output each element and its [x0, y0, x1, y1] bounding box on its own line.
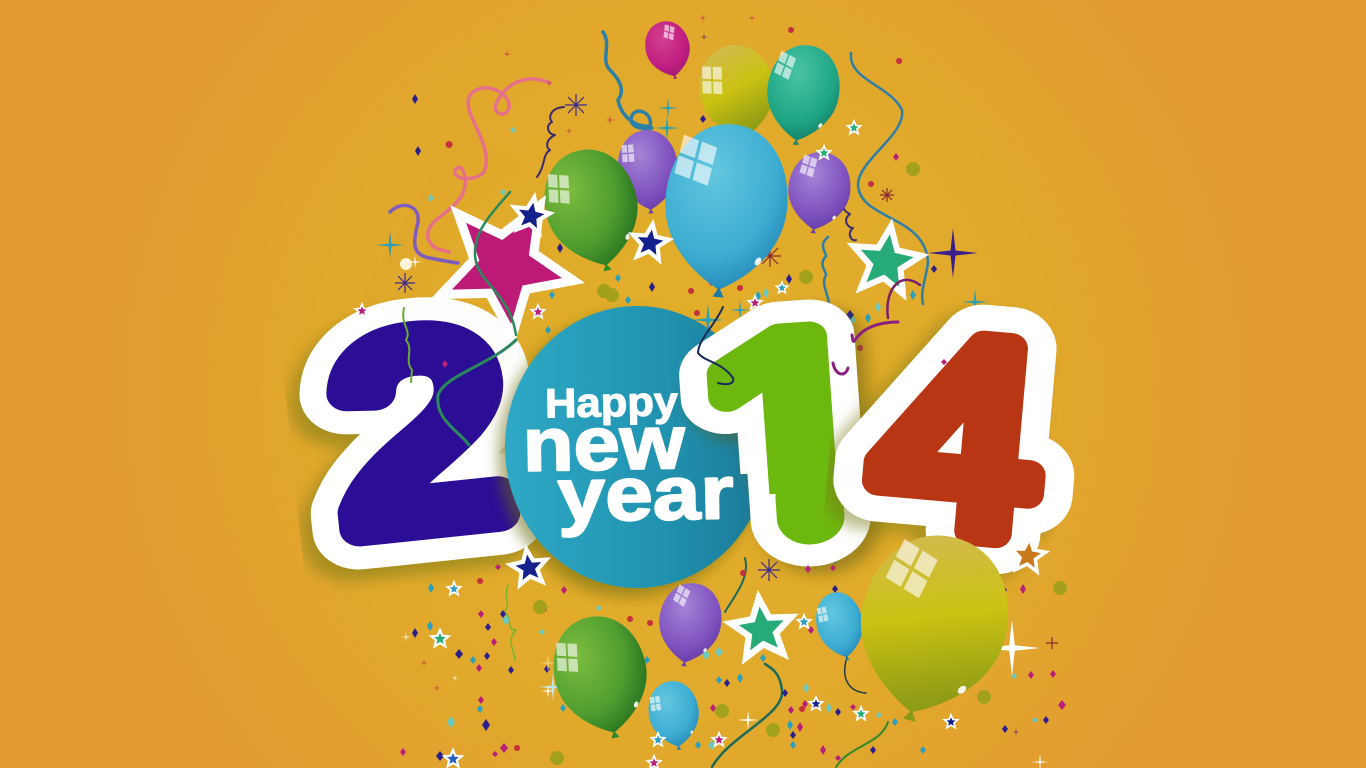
sparkles — [376, 14, 1048, 768]
digit 2: 2 — [320, 277, 520, 586]
balloon: purple left — [615, 128, 681, 216]
digit 2: 2 — [320, 277, 520, 586]
tagline: Happy new year: new — [522, 400, 686, 488]
ribbon: green over 2 — [438, 340, 516, 445]
star: small stars bottom — [431, 582, 958, 768]
ribbon: pink — [428, 79, 550, 252]
digit 1: 1 — [696, 279, 912, 604]
confetti: navy — [412, 94, 1049, 761]
ribbon: lime curl over 2 — [403, 308, 412, 382]
star: green top right — [840, 222, 925, 301]
ribbon: lime near large balloon — [836, 722, 888, 767]
star: orange — [1009, 536, 1047, 572]
digit 2: 2 — [311, 288, 511, 597]
star: navy below 2 — [508, 547, 549, 586]
digit 4: 4 — [851, 286, 1042, 601]
ribbon: blue curl — [822, 237, 830, 312]
glow — [400, 258, 412, 270]
balloon: green bottom — [543, 607, 660, 748]
balloon: large blue — [657, 119, 794, 302]
blue circle — [498, 306, 769, 597]
confetti: magenta — [400, 136, 1066, 761]
ribbon: dark curl left — [537, 107, 564, 177]
ribbon: dark curl right — [843, 197, 856, 240]
ribbon: dark curl over 1 — [698, 307, 733, 384]
ribbon: green over magenta star — [475, 192, 516, 335]
balloon: purple right — [782, 148, 855, 237]
ribbon: purple curl near 1 — [833, 322, 898, 374]
balloon: large yellow — [838, 520, 1026, 738]
tagline: Happy new year: year — [557, 450, 734, 538]
ribbon: lime curl — [504, 585, 516, 660]
balloon: small blue right — [811, 588, 870, 665]
confetti: olive dots — [533, 162, 1067, 765]
balloon: green — [533, 140, 652, 282]
ribbon: lower dark green — [712, 664, 782, 767]
digit 1: 1 — [685, 271, 901, 597]
confetti: red dots — [446, 27, 902, 751]
balloon: teal top — [760, 40, 845, 150]
ribbon: magenta over green star — [887, 280, 920, 318]
balloon: purple bottom — [653, 579, 726, 670]
star: small stars top — [748, 121, 861, 309]
star: navy by green balloon — [630, 222, 671, 261]
confetti over the digits — [442, 359, 947, 573]
digit 4: 4 — [863, 279, 1054, 594]
balloon: yellow top — [694, 40, 780, 144]
tagline: Happy new year — [522, 377, 734, 539]
star: navy by magenta — [511, 194, 552, 234]
star: green bottom — [717, 595, 795, 669]
bursts — [395, 94, 1058, 649]
confetti: teal and blue — [427, 274, 1040, 754]
ribbon: dark under blue balloon — [845, 657, 866, 693]
ribbon: lower green — [725, 558, 746, 612]
digit 4: 4 — [863, 279, 1054, 594]
balloon: magenta — [640, 17, 697, 84]
tagline: Happy new year: Happy — [545, 378, 679, 426]
star: large magenta — [401, 165, 605, 366]
ribbon: purple left — [390, 205, 458, 263]
digit 1: 1 — [685, 271, 901, 597]
ribbon: right blue — [851, 53, 928, 304]
confetti: pale aqua — [428, 127, 1038, 750]
balloon: small blue bottom — [645, 678, 704, 753]
ribbon: top blue — [603, 32, 652, 129]
star: small magenta stars — [355, 304, 545, 318]
